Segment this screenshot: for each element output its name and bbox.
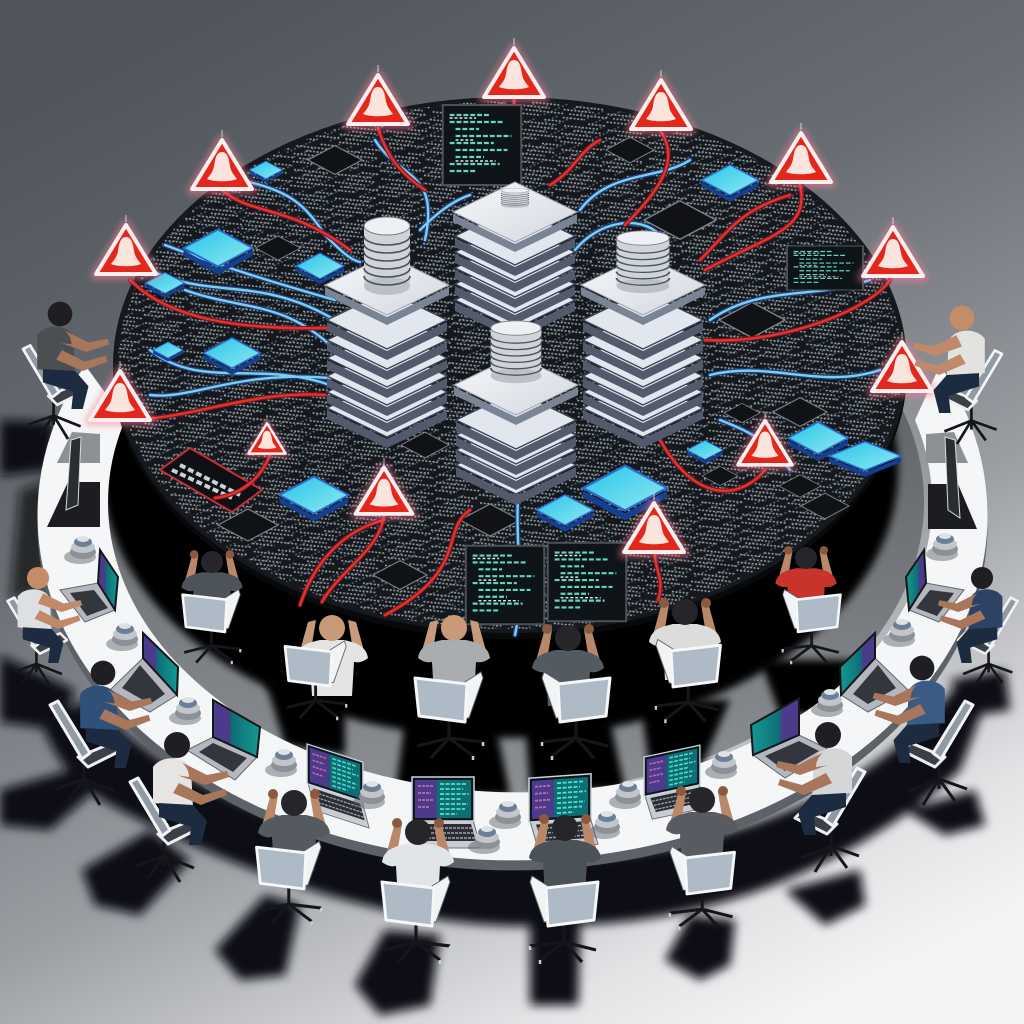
side chairs at the desk ends and flanks	[7, 345, 1017, 882]
outer row operators at laptops	[18, 302, 1002, 900]
cyan circuit tiles	[146, 161, 901, 532]
code monitors on the table	[443, 105, 863, 624]
red warning triangles	[88, 38, 934, 554]
dark circuit modules	[218, 137, 849, 589]
red alert wires	[125, 100, 890, 615]
side monitors and keyboards on the desk	[47, 432, 977, 529]
server tower: left	[325, 217, 449, 448]
angled laptops on the left of the desk	[60, 550, 260, 780]
blue network wires	[150, 140, 880, 635]
central circuit table	[113, 97, 907, 639]
curved white desk	[37, 365, 988, 870]
server tower: back centre	[453, 182, 577, 340]
red-rimmed data panel on the table	[160, 448, 262, 512]
server tower: front centre	[454, 321, 578, 505]
inner row chairs	[182, 590, 840, 760]
floor inside the desk ring	[100, 212, 924, 792]
table shadow on the inner floor	[102, 202, 898, 795]
desk gadgets	[64, 533, 958, 854]
server tower: right	[581, 231, 705, 448]
angled laptops on the right of the desk	[751, 550, 964, 778]
front row chairs	[256, 842, 734, 964]
front laptops on the desk	[307, 744, 706, 849]
outer desk and chair shadows on the floor	[0, 420, 1010, 1015]
inner row operators reaching to the table	[181, 546, 837, 706]
